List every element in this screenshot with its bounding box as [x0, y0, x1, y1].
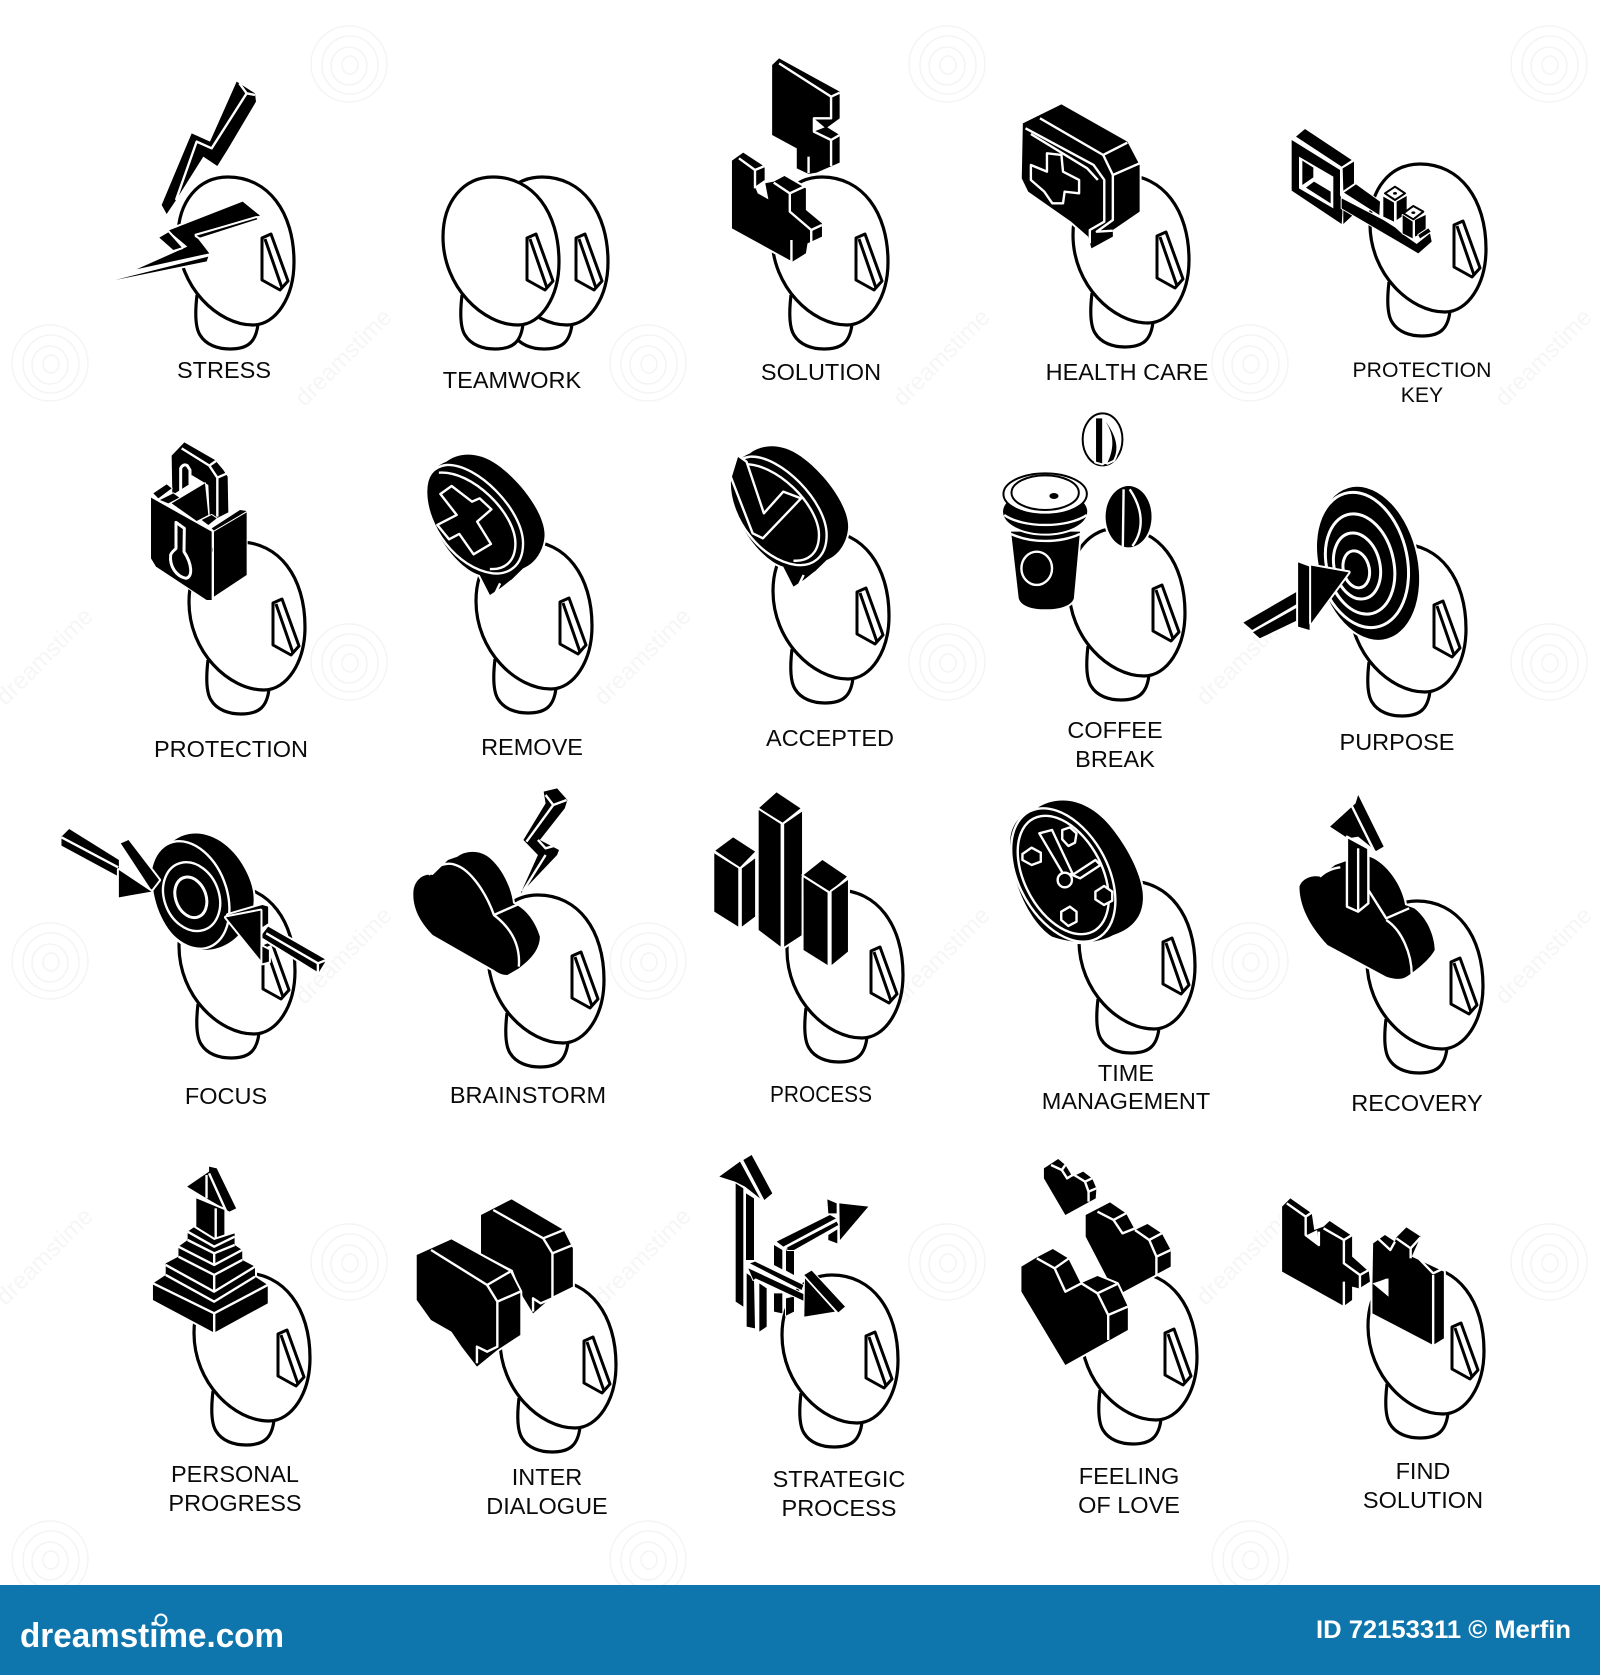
label: strategic: STRATEGIC: [773, 1466, 905, 1492]
label: teamwork: TEAMWORK: [443, 367, 582, 393]
panel: coffee break: [1003, 413, 1185, 772]
head: [189, 542, 305, 714]
label: inter: INTER: [512, 1464, 582, 1490]
icon: accepted coin: [730, 446, 848, 587]
label: process: PROCESS: [770, 1081, 872, 1107]
panel: health care: [1022, 104, 1208, 385]
icon: key: [1292, 129, 1432, 253]
icon: logo spiral: [156, 1614, 166, 1626]
head: [1073, 175, 1189, 347]
head: [782, 1275, 898, 1447]
label: recovery: RECOVERY: [1351, 1090, 1483, 1116]
panel: process: [714, 792, 903, 1107]
image id and author: ID 72153311 © Merfin: [1316, 1616, 1571, 1644]
head: [773, 531, 889, 703]
watermark pattern: dreamstime: [888, 902, 996, 1010]
head: [1069, 528, 1185, 700]
watermark pattern: dreamstime: [1191, 603, 1299, 711]
label: dialogue: DIALOGUE: [486, 1493, 608, 1519]
icon: puzzle pieces: [732, 58, 840, 262]
icon: matching puzzle pieces: [1282, 1198, 1444, 1345]
head: [1079, 881, 1195, 1053]
icon: padlock: [151, 442, 247, 600]
icon: coffee cup and beans: [1003, 413, 1152, 609]
panel: feeling of love: [1021, 1159, 1197, 1518]
icon: cloud and lightning: [413, 788, 567, 975]
watermark pattern: dreamstime: [589, 1203, 697, 1311]
icon: pyramid with arrow: [153, 1167, 268, 1333]
label: remove: REMOVE: [481, 734, 583, 760]
label: health care: HEALTH CARE: [1046, 359, 1208, 385]
icon: hearts: [1021, 1159, 1171, 1365]
icon: remove coin: [426, 455, 545, 595]
panel: solution: [732, 58, 888, 385]
icon: medical speech bubble: [1022, 104, 1140, 248]
label: of love: OF LOVE: [1078, 1492, 1180, 1518]
head: [1367, 901, 1483, 1073]
label: process: PROCESS: [782, 1495, 896, 1521]
head: [194, 1273, 310, 1445]
label: focus: FOCUS: [185, 1083, 267, 1109]
label: brainstorm: BRAINSTORM: [450, 1082, 606, 1108]
watermark pattern: dreamstime: [1490, 902, 1598, 1010]
head: [179, 886, 295, 1058]
head: [772, 177, 888, 349]
label: management: MANAGEMENT: [1042, 1088, 1210, 1114]
watermark pattern: dreamstime: [888, 304, 996, 412]
panel: protection: [151, 442, 308, 762]
icon: target and arrow: [1243, 480, 1432, 647]
label: protection key: PROTECTION: [1353, 359, 1491, 382]
panel: time management: [992, 801, 1210, 1114]
label: purpose: PURPOSE: [1340, 729, 1454, 755]
head: [488, 895, 604, 1067]
panel: find solution: [1282, 1198, 1484, 1513]
panel: purpose: [1243, 480, 1466, 755]
label: solution: SOLUTION: [1363, 1487, 1483, 1513]
front head: [443, 177, 559, 349]
watermark pattern: dreamstime: [290, 902, 398, 1010]
watermark pattern: dreamstime: [290, 304, 398, 412]
head: [500, 1280, 616, 1452]
panel: brainstorm: [413, 788, 606, 1108]
icon: clock: [992, 801, 1143, 949]
label: find: FIND: [1396, 1458, 1450, 1484]
watermark pattern: dreamstime: [1490, 304, 1598, 412]
label: break: BREAK: [1075, 746, 1155, 772]
watermark pattern: dreamstime: [589, 603, 697, 711]
head: [1350, 544, 1466, 716]
head: [1370, 164, 1486, 336]
head: [1081, 1272, 1197, 1444]
head: [178, 177, 294, 349]
panel: protection key: [1292, 129, 1491, 407]
label: personal: PERSONAL: [171, 1461, 299, 1487]
panel: remove: [426, 455, 592, 760]
label: time: TIME: [1098, 1060, 1154, 1086]
label: protection key second line: KEY: [1401, 384, 1443, 407]
watermark pattern: dreamstime: [1191, 1203, 1299, 1311]
panel: strategic process: [719, 1155, 905, 1521]
label: feeling: FEELING: [1079, 1463, 1179, 1489]
label: solution: SOLUTION: [761, 359, 881, 385]
panel: inter dialogue: [417, 1199, 616, 1519]
label: protection: PROTECTION: [154, 736, 308, 762]
footer bar: [0, 1585, 1600, 1675]
head: [787, 890, 903, 1062]
label: stress: STRESS: [177, 357, 271, 383]
head: [1368, 1266, 1484, 1438]
panel: teamwork: [443, 177, 608, 393]
panel: focus: [61, 829, 326, 1109]
icon: speech bubbles: [417, 1199, 573, 1367]
label: coffee: COFFEE: [1067, 717, 1163, 743]
head: [476, 541, 592, 713]
panel: personal progress: [153, 1167, 310, 1516]
panel: accepted: [730, 446, 894, 751]
icon: target with two arrows: [61, 829, 326, 973]
back head: [492, 177, 608, 349]
icon: lightning bolts: [115, 82, 260, 280]
icon: cloud with arrow: [1299, 795, 1435, 979]
icon: bar chart: [714, 792, 848, 965]
label: accepted: ACCEPTED: [766, 725, 894, 751]
icon: branching arrows: [719, 1155, 868, 1332]
label: progress: PROGRESS: [168, 1490, 302, 1516]
panel: recovery: [1299, 795, 1483, 1116]
panel: stress: [115, 82, 294, 383]
logo: dreamstime: dreamstime.com: [20, 1617, 284, 1655]
